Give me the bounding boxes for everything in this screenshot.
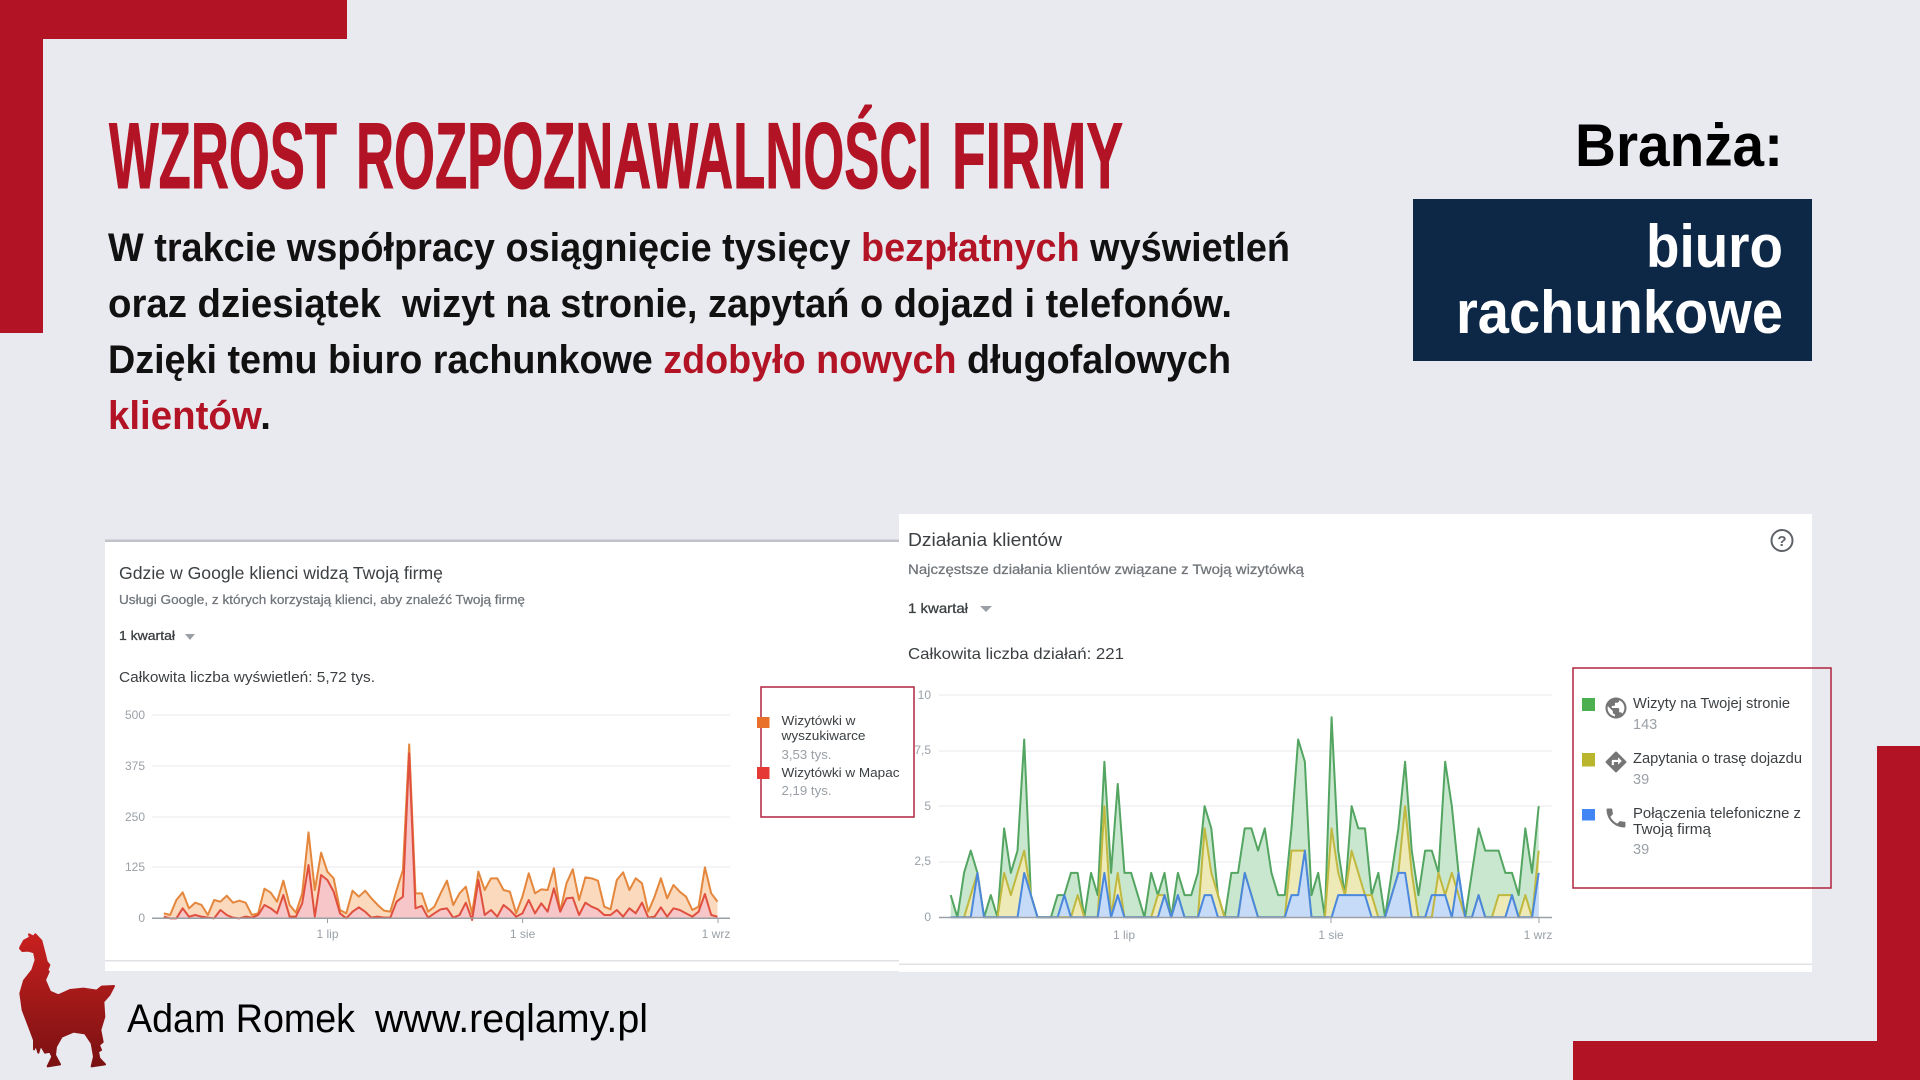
text block: description: klientów. — [108, 394, 271, 438]
legend item: website visits: 143 — [1633, 717, 1657, 733]
badge: industry name: rachunkowe — [1456, 279, 1783, 346]
chart: views area chart: 1 wrz — [702, 927, 730, 941]
badge: industry name — [1413, 199, 1812, 361]
chart: views area chart: 1 sie — [510, 927, 536, 941]
chart: views area chart — [125, 708, 730, 941]
legend item: phone calls — [1582, 806, 1801, 858]
chart: actions area chart: 5 — [924, 799, 931, 813]
panel subheading: Usługi Google, z których korzystają klienci, aby znaleźć Twoją firmę — [119, 592, 525, 607]
footer: author and website: Adam Romek — [127, 997, 356, 1041]
chart: actions area chart: 2,5 — [914, 854, 931, 868]
legend: actions — [1573, 668, 1831, 888]
chart: views area chart: 250 — [125, 810, 145, 824]
legend: views: wyszukiwarce — [780, 728, 866, 743]
legend item: phone calls: Połączenia telefoniczne z — [1633, 806, 1801, 822]
chart: actions area chart — [914, 688, 1552, 942]
chart: actions area chart: 1 lip — [1113, 928, 1135, 942]
total actions: Całkowita liczba działań: 221 — [908, 646, 1124, 663]
legend item: phone calls: 39 — [1633, 842, 1649, 858]
title: WZROST — [109, 103, 337, 208]
total views: Całkowita liczba wyświetleń: 5,72 tys. — [119, 669, 375, 686]
chart: actions area chart: 1 sie — [1318, 928, 1344, 942]
panel heading: Działania klientów — [908, 530, 1063, 550]
panel subheading: Najczęstsze działania klientów związane z Twoją wizytówką — [908, 562, 1305, 577]
legend item: website visits — [1582, 696, 1790, 733]
legend: views: 3,53 tys. — [782, 747, 832, 762]
panel: where customers see the company — [105, 540, 899, 971]
period selector: 1 kwartał — [908, 600, 969, 616]
text block: description: wizyt na stronie, zapytań o dojazd i telefonów. — [401, 282, 1232, 326]
icon: help: ? — [1777, 533, 1787, 550]
label: industry heading: Branża: — [1575, 112, 1783, 179]
legend: views: Wizytówki w — [782, 713, 856, 728]
text block: description: oraz dziesiątek — [108, 282, 382, 326]
chart: actions area chart: 0 — [924, 910, 931, 924]
chart: views area chart: 500 — [125, 708, 145, 722]
chart: actions area chart: 7,5 — [914, 743, 931, 757]
legend: views: 2,19 tys. — [782, 783, 832, 798]
legend item: direction requests — [1582, 751, 1802, 788]
period selector — [119, 628, 195, 643]
text block: description: W trakcie współpracy osiągnięcie tysięcy bezpłatnych wyświetleń — [108, 226, 1290, 270]
chart: actions area chart: 10 — [918, 688, 931, 702]
chart: actions area chart: 1 wrz — [1524, 928, 1552, 942]
badge: industry name: biuro — [1646, 213, 1783, 280]
legend item: phone calls: Twoją firmą — [1633, 822, 1712, 838]
period selector — [908, 600, 992, 616]
footer: author and website — [127, 997, 648, 1041]
text block: description — [108, 226, 1290, 438]
chart: views area chart: 1 lip — [316, 927, 339, 941]
corner frame: bottom right — [1573, 746, 1920, 1080]
legend: views — [757, 687, 914, 817]
title — [109, 103, 1123, 208]
title: FIRMY — [952, 103, 1123, 208]
panel: customer actions — [899, 514, 1812, 972]
legend item: direction requests: Zapytania o trasę dojazdu — [1633, 751, 1802, 767]
icon: help — [1772, 530, 1792, 551]
corner frame: top left — [0, 0, 347, 333]
chart: views area chart: 375 — [125, 759, 145, 773]
title: ROZPOZNAWALNOŚCI — [356, 103, 932, 208]
chart: views area chart: 0 — [138, 911, 145, 925]
footer: author and website: www.reqlamy.pl — [374, 997, 648, 1041]
logo: red llama — [20, 934, 114, 1066]
legend item: website visits: Wizyty na Twojej stronie — [1633, 696, 1790, 712]
legend: views: Wizytówki w Mapac — [782, 765, 900, 780]
text block: description: Dzięki temu biuro rachunkowe zdobyło nowych długofalowych — [108, 338, 1231, 382]
period selector: 1 kwartał — [119, 628, 175, 643]
chart: views area chart: 125 — [125, 860, 145, 874]
panel heading: Gdzie w Google klienci widzą Twoją firmę — [119, 563, 443, 583]
legend item: direction requests: 39 — [1633, 772, 1649, 788]
